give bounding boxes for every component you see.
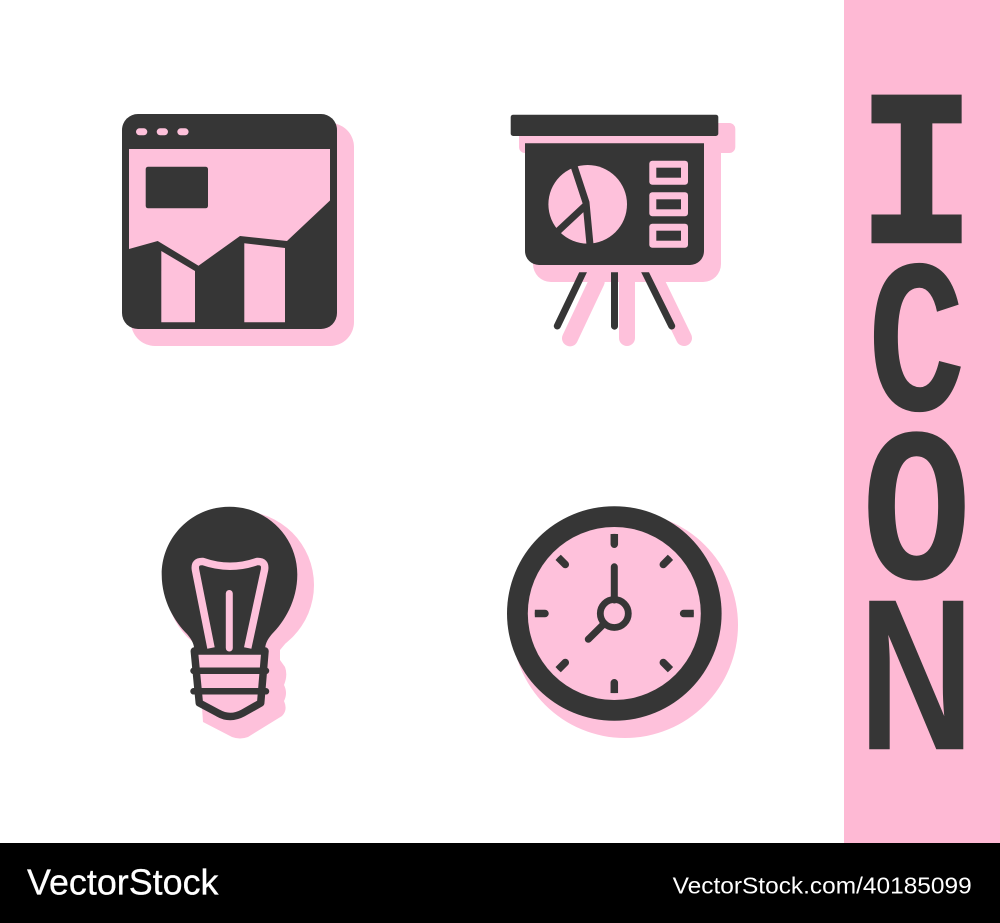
footer brand: VectorStock xyxy=(27,861,219,902)
icon: wall clock xyxy=(507,506,738,738)
footer image id: VectorStock.com/40185099 xyxy=(673,872,972,898)
letter O: O xyxy=(862,395,971,645)
icon: presentation board with pie chart xyxy=(511,115,735,338)
panel: pink sidebar with vertical word xyxy=(844,0,1000,843)
letter I: I xyxy=(859,59,974,307)
icon: light bulb xyxy=(162,507,314,738)
letter C: C xyxy=(868,228,965,477)
icon: browser window with chart xyxy=(122,114,354,346)
letter N: N xyxy=(859,555,974,796)
footer bar xyxy=(0,843,1000,923)
